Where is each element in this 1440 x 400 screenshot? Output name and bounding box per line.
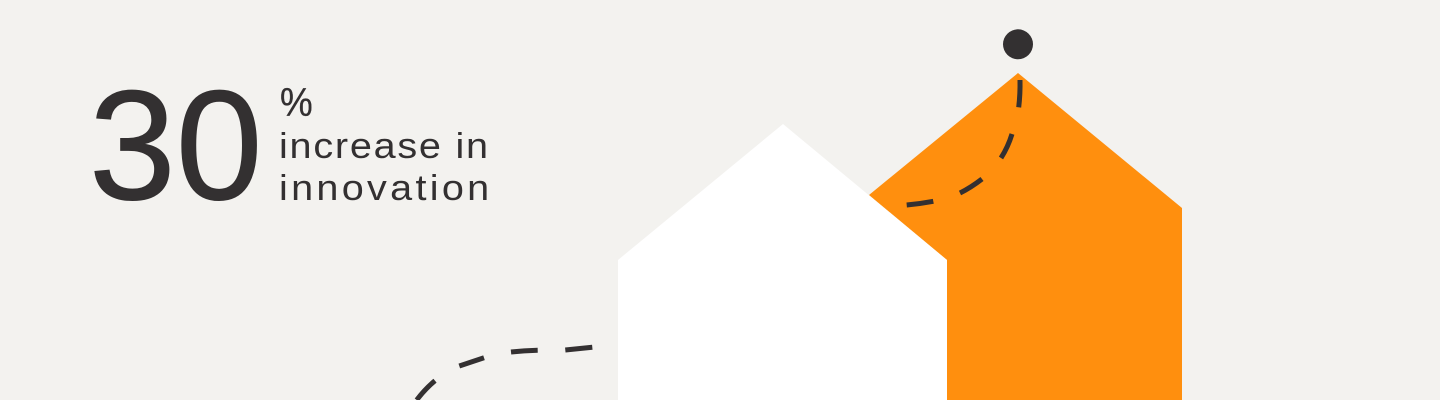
label line 1: increase in — [279, 127, 490, 167]
big number 30: 30 — [89, 59, 263, 233]
orange house — [869, 73, 1182, 400]
dashed path approaching white house — [417, 347, 592, 400]
white house — [618, 124, 947, 400]
statistic block — [89, 59, 492, 233]
dashed path on orange house — [907, 80, 1020, 205]
dot at roof peak — [1003, 29, 1033, 59]
percent sign: % — [280, 81, 313, 125]
label line 2: innovation — [279, 169, 492, 209]
